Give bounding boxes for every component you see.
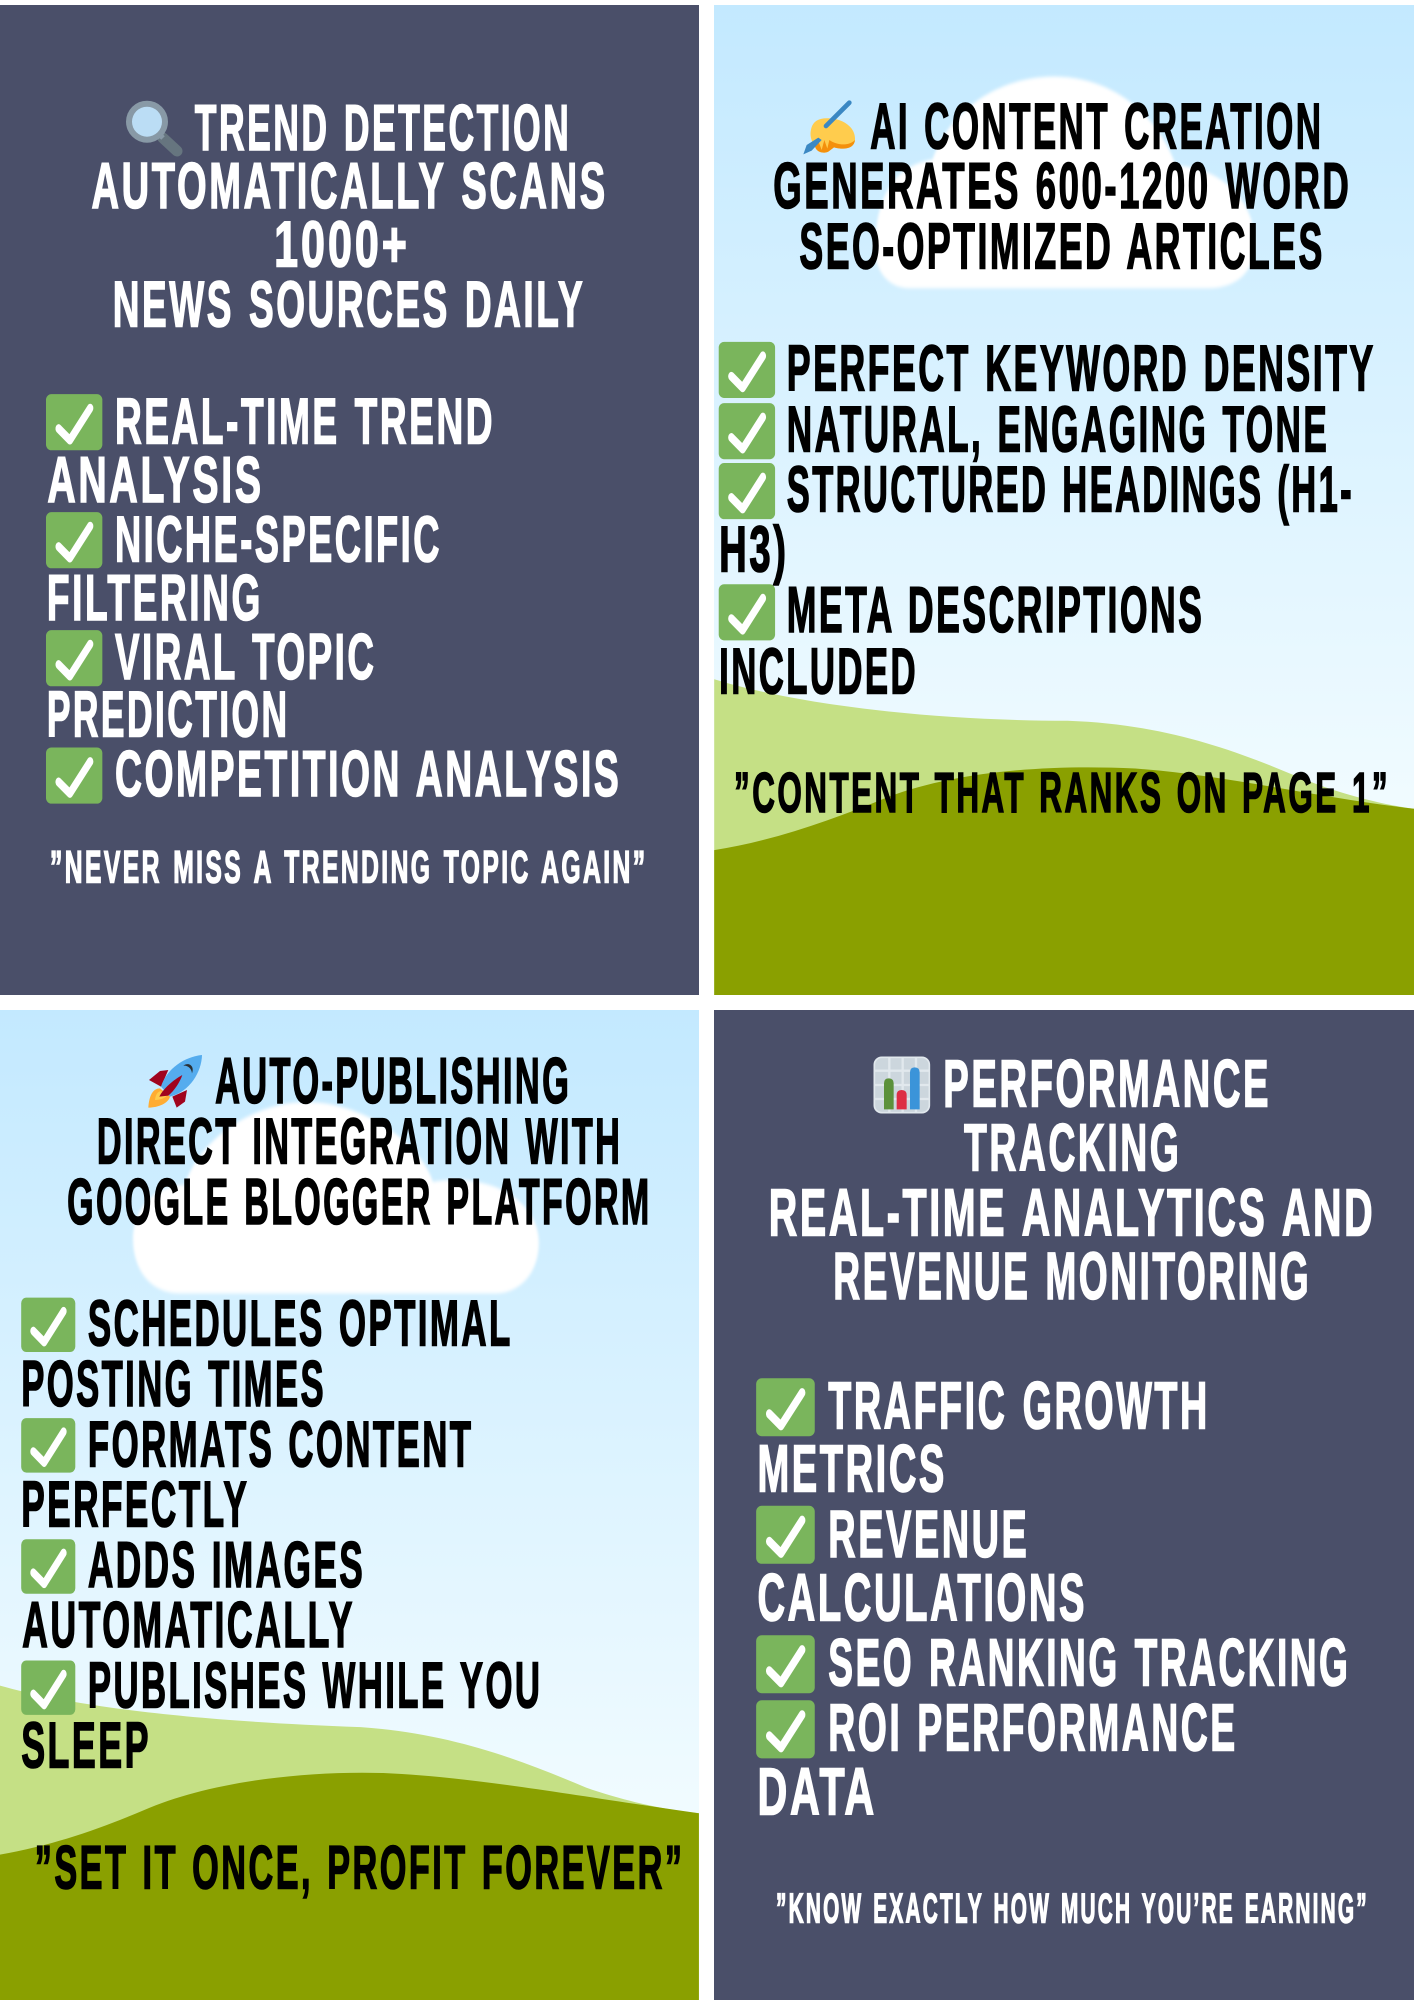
heading: ai content creation [773,90,1351,282]
heading: performance tracking: TRACKING [964,1111,1181,1185]
heading: trend detection [92,91,608,340]
checklist: trend detection: REAL-TIME TREND [115,384,495,457]
checklist: ai content creation: META DESCRIPTIONS [787,573,1204,646]
panel: auto-publishing [0,1010,699,2000]
heading: auto-publishing [67,1044,652,1238]
heading: auto-publishing: DIRECT INTEGRATION WITH [97,1105,622,1177]
icon: magnifying glass [126,101,177,151]
checklist: performance tracking: CALCULATIONS [758,1562,1087,1636]
checklist: trend detection: FILTERING [47,561,263,634]
checklist: trend detection: PREDICTION [47,678,289,751]
background: cloud and hills [0,1102,699,2000]
icon: bar chart [874,1057,929,1113]
heading: trend detection: TREND DETECTION [195,91,571,164]
heading: auto-publishing: AUTO-PUBLISHING [215,1044,571,1117]
checklist: auto-publishing: SCHEDULES OPTIMAL [88,1287,513,1359]
checklist: auto-publishing [21,1287,542,1781]
heading: trend detection: AUTOMATICALLY SCANS [92,149,608,222]
checklist: ai content creation: H3) [719,513,789,585]
checklist: performance tracking: DATA [758,1756,877,1829]
heading: trend detection: NEWS SOURCES DAILY [113,268,585,340]
checklist: ai content creation [719,331,1376,707]
panel: performance tracking [714,1010,1414,2000]
panel: trend detection [0,5,699,995]
panel: ai content creation [714,5,1414,1000]
checklist: trend detection [46,384,621,810]
heading: performance tracking [769,1048,1375,1314]
heading: auto-publishing: GOOGLE BLOGGER PLATFORM [67,1165,652,1238]
checklist: auto-publishing: PUBLISHES WHILE YOU [88,1649,542,1722]
background: cloud and hills [714,77,1414,1000]
checklist: ai content creation: INCLUDED [719,634,918,707]
checklist: trend detection: VIRAL TOPIC [115,620,377,693]
checklist: trend detection: COMPETITION ANALYSIS [115,737,621,810]
checklist: auto-publishing: ADDS IMAGES [88,1528,365,1601]
checklist: auto-publishing: FORMATS CONTENT [88,1408,473,1480]
checklist: performance tracking: REVENUE [828,1498,1029,1572]
heading: trend detection: 1000+ [274,208,410,280]
icon: writing hand [803,103,855,154]
checklist: trend detection: ANALYSIS [47,443,264,516]
checklist: auto-publishing: AUTOMATICALLY [22,1588,355,1661]
checklist: auto-publishing: PERFECTLY [21,1468,249,1540]
checklist: performance tracking [756,1370,1350,1829]
checklist: auto-publishing: SLEEP [21,1709,151,1781]
checklist: performance tracking: METRICS [758,1433,947,1507]
checklist: performance tracking: TRAFFIC GROWTH [828,1370,1210,1444]
quote: set it once: ”SET IT ONCE, PROFIT FOREVER” [35,1834,684,1902]
icon: rocket [148,1055,202,1108]
checklist: auto-publishing: POSTING TIMES [21,1347,326,1420]
checklist: performance tracking: ROI PERFORMANCE [828,1692,1238,1766]
checklist: trend detection: NICHE-SPECIFIC [115,502,442,575]
heading: performance tracking: PERFORMANCE [943,1048,1271,1122]
quote: never miss: ”NEVER MISS A TRENDING TOPIC AGAIN” [50,843,647,893]
